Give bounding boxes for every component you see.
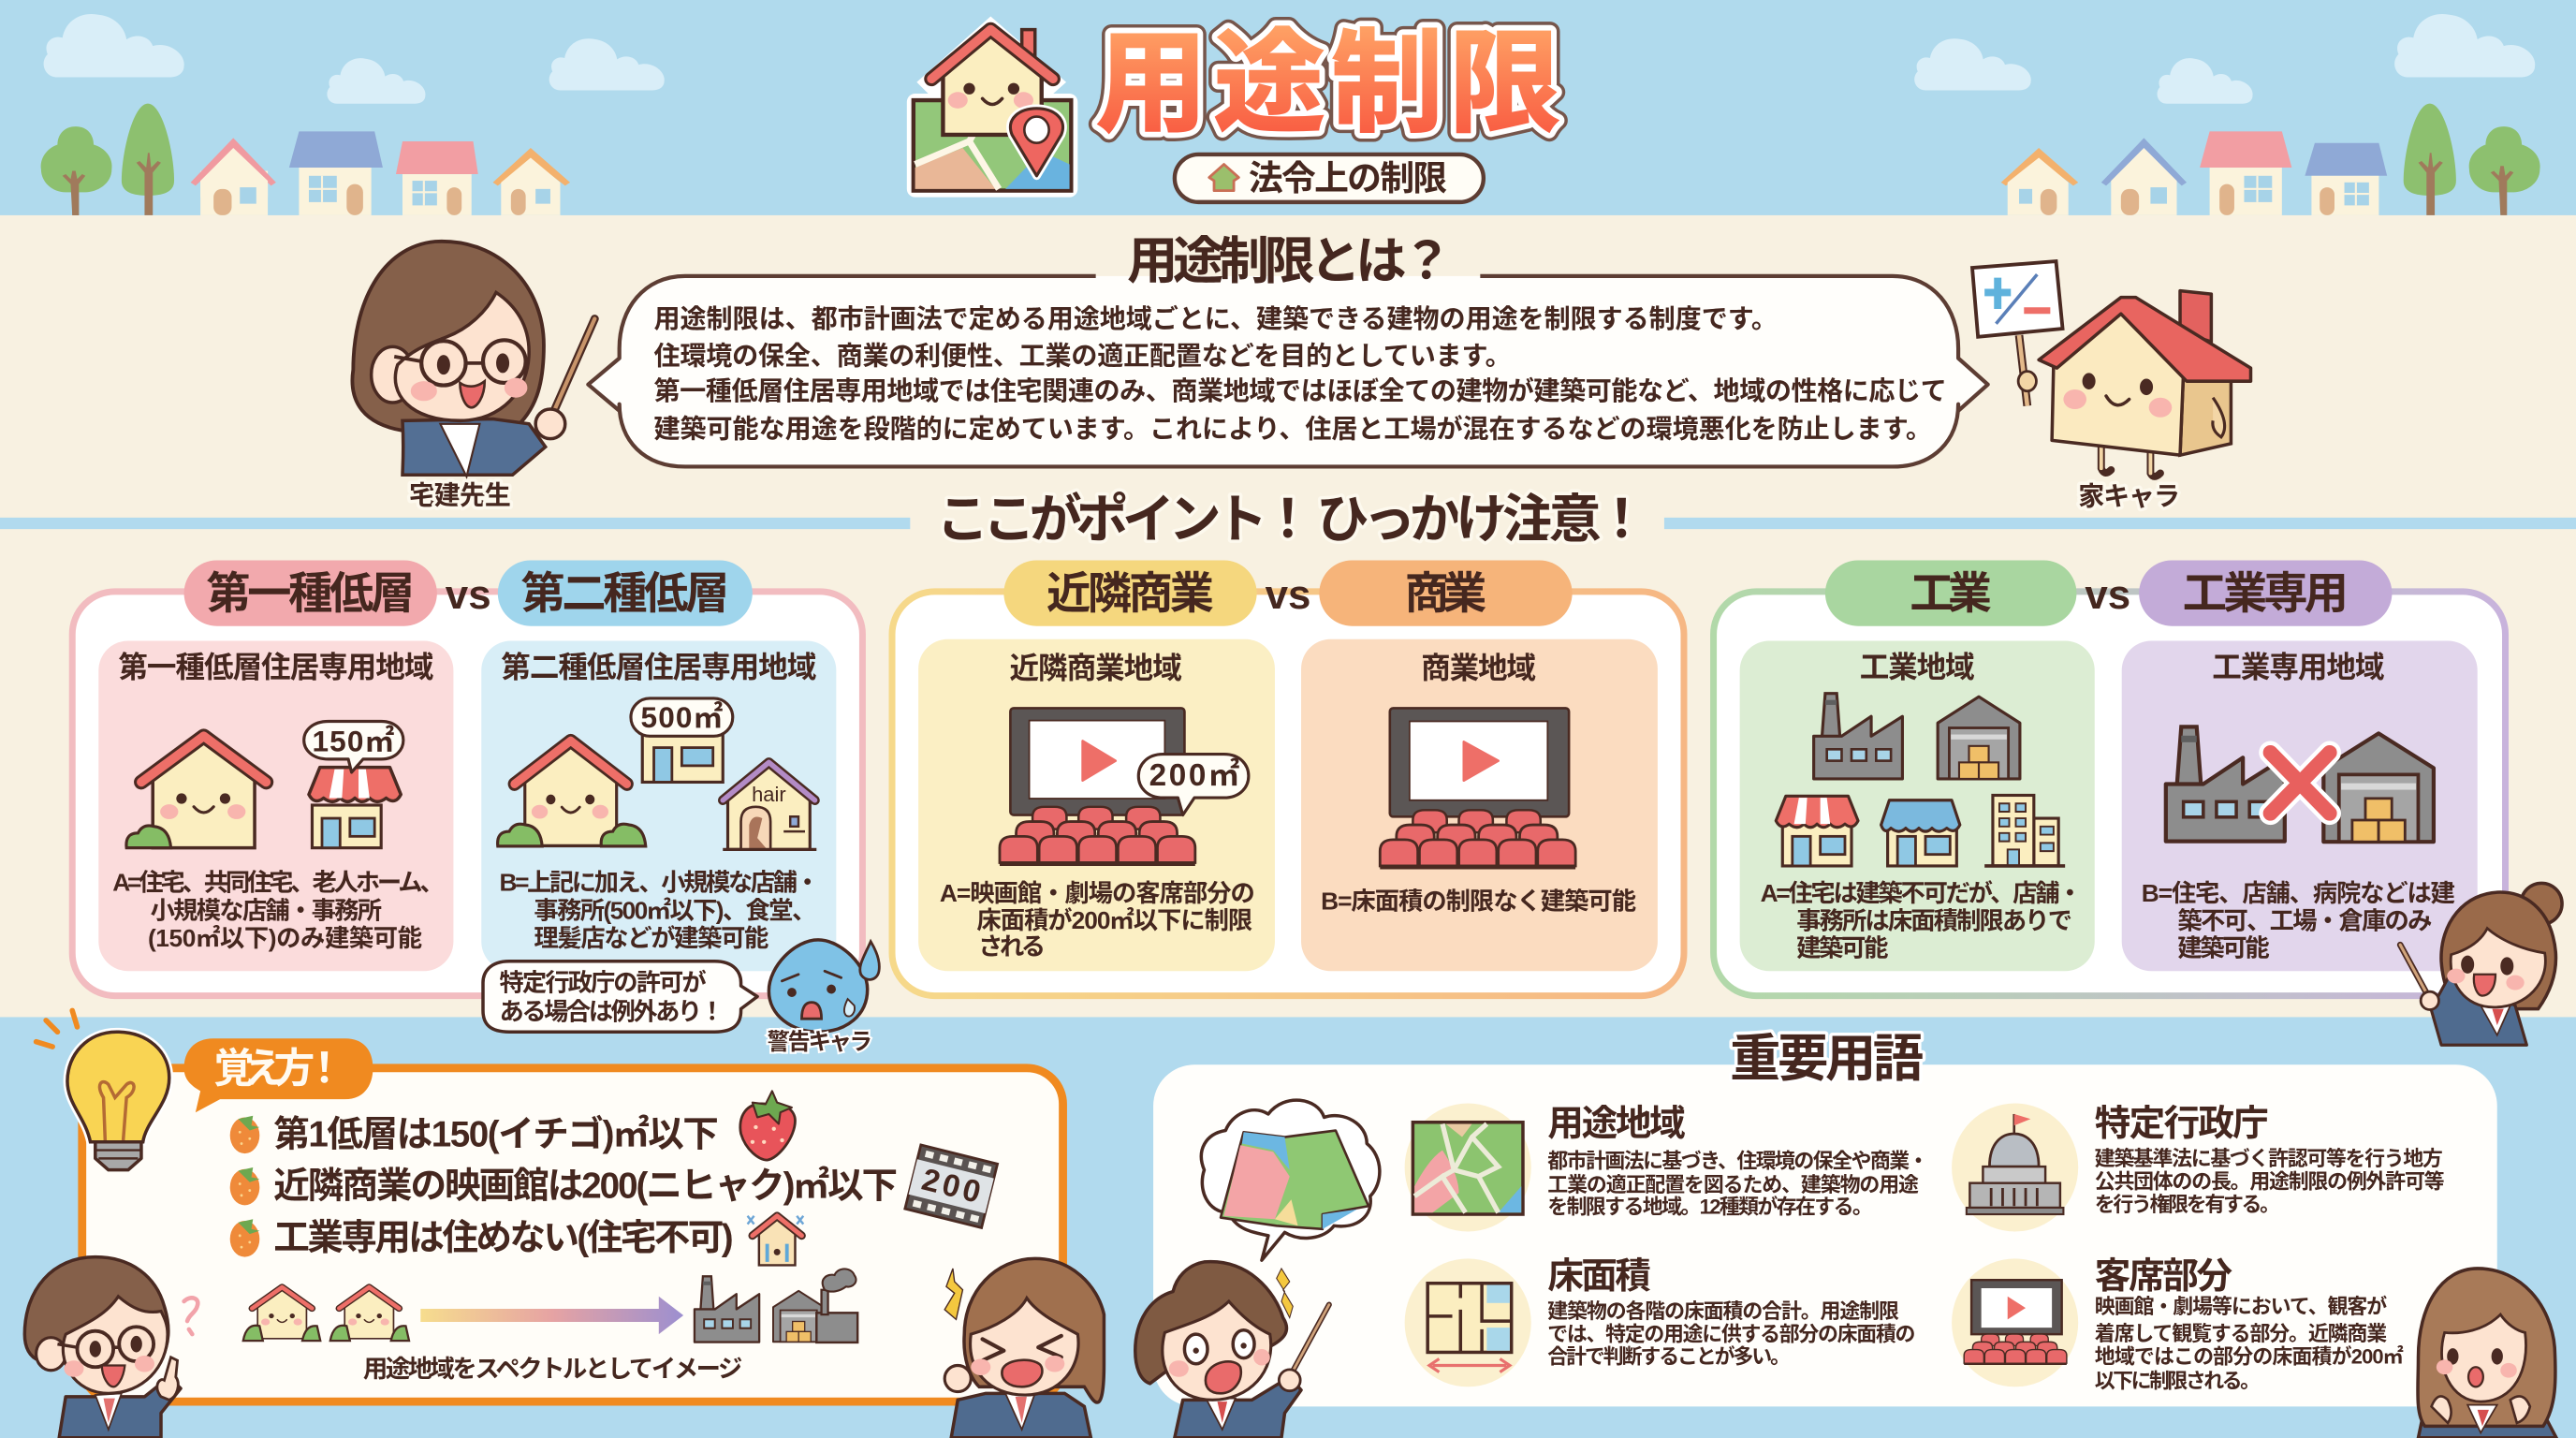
speech bubble: explanation: 住環境の保全、商業の利便性、工業の適正配置などを目的としています。 <box>654 341 1512 370</box>
card: neighbourhood commercial: される <box>978 932 1046 961</box>
background: cream band <box>0 215 2576 1019</box>
card: exclusive industrial: B=住宅、店舗、病院などは建 <box>2142 879 2455 907</box>
tip 1: 第1低層は150(イチゴ)㎡以下 <box>273 1114 719 1154</box>
label: vs: vs <box>1266 572 1310 618</box>
card: industrial <box>1740 640 2095 971</box>
card: industrial: 工業地域 <box>1860 651 1975 684</box>
term: floor area: では、特定の用途に供する部分の床面積の <box>1547 1323 1915 1346</box>
pill: commercial: 商業 <box>1405 569 1486 619</box>
term: zoning district: を制限する地域。12種類が存在する。 <box>1547 1196 1873 1219</box>
icon: factory and warehouse <box>1814 694 2020 779</box>
icon: film strip 200: 200 <box>918 1163 984 1211</box>
speech bubble: explanation: 建築可能な用途を段階的に定めています。これにより、住居と工場が混在するなどの環境悪化を防止します。 <box>654 414 1932 444</box>
icon: map and house logo <box>907 17 1077 198</box>
pill: class 1 low-rise <box>184 560 437 626</box>
callout: warning bubble <box>483 961 757 1032</box>
card: commercial: 商業地域 <box>1421 651 1536 684</box>
pill: class 1 low-rise: 第一種低層 <box>206 569 415 619</box>
tip 2: 近隣商業の映画館は200(ニヒャク)㎡以下 <box>273 1167 898 1207</box>
card: commercial <box>1301 639 1658 971</box>
icon: shop with 500 bubble <box>631 698 733 782</box>
label: warning character: 警告キャラ <box>768 1029 872 1055</box>
icon: hair salon: hair <box>752 783 786 806</box>
card: industrial: A=住宅は建築不可だが、店舗・ <box>1761 879 2083 907</box>
card: neighbourhood commercial <box>918 639 1275 971</box>
card: neighbourhood commercial: 近隣商業地域 <box>1010 651 1182 684</box>
subtitle pill <box>1175 154 1484 202</box>
term: audience seating: 着席して観覧する部分。近隣商業 <box>2095 1322 2387 1345</box>
character: warning droplet <box>768 940 879 1032</box>
term: audience seating: 以下に制限される。 <box>2095 1370 2261 1393</box>
card: class 2 low-rise: 事務所(500㎡以下)、食堂、 <box>534 896 816 924</box>
character: surprised boy with pointer <box>1135 1262 1329 1438</box>
card: exclusive industrial: 築不可、工場・倉庫のみ <box>2177 907 2432 935</box>
badge: how to remember: 覚え方！ <box>213 1046 345 1092</box>
icon: hair salon <box>723 762 816 849</box>
card: class 1 low-rise <box>98 640 453 971</box>
label: house character: 家キャラ <box>2078 482 2180 511</box>
term: designated administrative agency: 公共団体のの長。用途制限の例外許可等 <box>2095 1169 2445 1193</box>
pill: class 2 low-rise <box>498 560 753 626</box>
icon: smiling house <box>498 741 646 846</box>
pill: commercial <box>1319 560 1573 626</box>
term: designated administrative agency <box>1952 1104 2445 1231</box>
pill: neighbourhood commercial <box>1003 560 1257 626</box>
icon: thought bubble with map <box>1201 1100 1380 1260</box>
card: class 2 low-rise: 理髪店などが建築可能 <box>534 924 768 952</box>
card: neighbourhood commercial: A=映画館・劇場の客席部分の <box>940 879 1255 907</box>
term: audience seating <box>1952 1256 2404 1393</box>
card: class 1 low-rise: 第一種低層住居専用地域 <box>118 651 433 684</box>
subtitle pill: 法令上の制限 <box>1249 159 1447 198</box>
card: neighbourhood commercial: 床面積が200㎡以下に制限 <box>976 906 1252 934</box>
term: zoning district <box>1405 1104 1928 1231</box>
term: zoning district: 都市計画法に基づき、住環境の保全や商業・ <box>1547 1149 1928 1172</box>
panel: commercial comparison <box>892 560 1684 996</box>
character: teacher with pointer <box>352 242 594 477</box>
speech bubble: explanation: 第一種低層住居専用地域では住宅関連のみ、商業地域ではほぼ全ての建物が建築可能など、地域の性格に応じて <box>654 375 1947 405</box>
character: worried long-haired girl <box>2418 1269 2556 1438</box>
clouds right <box>1914 14 2535 104</box>
term: audience seating: 地域ではこの部分の床面積が200㎡ <box>2095 1344 2404 1368</box>
term: floor area: 建築物の各階の床面積の合計。用途制限 <box>1547 1299 1899 1323</box>
title: 用途制限 <box>1096 22 1560 146</box>
icon: strawberry <box>740 1091 795 1160</box>
pill: exclusive industrial <box>2139 560 2392 626</box>
icon: cinema with seats <box>1380 708 1575 868</box>
pill: industrial: 工業 <box>1910 569 1992 619</box>
heading: points to watch: ここがポイント！ ひっかけ注意！ <box>936 490 1647 549</box>
icon: crying house <box>748 1216 803 1265</box>
character: frustrated girl <box>944 1258 1104 1438</box>
callout: warning bubble: ある場合は例外あり！ <box>500 997 724 1025</box>
icon: cinema with seats: 200㎡ <box>1149 758 1239 793</box>
term: audience seating: 映画館・劇場等において、観客が <box>2095 1295 2387 1318</box>
term: designated administrative agency: 特定行政庁 <box>2095 1104 2269 1144</box>
card: industrial: 建築可能 <box>1796 934 1888 962</box>
card: exclusive industrial: 建築可能 <box>2177 934 2270 962</box>
background: sky <box>0 0 2576 217</box>
term: zoning district: 工業の適正配置を図るため、建築物の用途 <box>1547 1173 1919 1196</box>
card: class 2 low-rise: B=上記に加え、小規模な店舗・ <box>500 868 820 896</box>
term: zoning district: 用途地域 <box>1547 1104 1686 1144</box>
pill: neighbourhood commercial: 近隣商業 <box>1046 569 1214 619</box>
character: house with sign <box>1972 261 2250 477</box>
card: industrial: 事務所は床面積制限ありで <box>1796 907 2072 935</box>
term: floor area: 床面積 <box>1547 1256 1651 1297</box>
icon: film strip 200 <box>905 1145 998 1227</box>
icon: factories <box>695 1269 857 1343</box>
icon: factory and warehouse crossed out <box>2166 726 2434 842</box>
icon: smiling house <box>126 736 266 848</box>
panel: memory tips <box>37 1010 1063 1401</box>
band lines beside point heading <box>0 518 2576 529</box>
speech bubble: explanation <box>588 276 1988 466</box>
title: 用途制限 <box>1096 22 1560 146</box>
icon: shops and office building <box>1776 795 2065 866</box>
badge: how to remember <box>184 1038 373 1112</box>
pill: class 2 low-rise: 第二種低層 <box>520 569 729 619</box>
label: spectrum caption: 用途地域をスペクトルとしてイメージ <box>363 1355 742 1383</box>
title: 用途制限 <box>1096 22 1560 146</box>
label: vs: vs <box>446 572 491 618</box>
panel: industrial comparison <box>1714 560 2506 996</box>
term: designated administrative agency: を行う権限を有する。 <box>2095 1193 2280 1216</box>
heading: key terms: 重要用語 <box>1730 1031 1924 1088</box>
heading: what is youto seigen: 用途制限とは？ <box>1127 233 1453 290</box>
card: commercial: B=床面積の制限なく建築可能 <box>1321 888 1636 916</box>
panel: key terms <box>1153 1064 2497 1406</box>
tip 3: 工業専用は住めない(住宅不可) <box>273 1218 734 1258</box>
card: class 2 low-rise: 第二種低層住居専用地域 <box>501 651 816 684</box>
card: class 1 low-rise: A=住宅、共同住宅、老人ホーム、 <box>112 868 445 896</box>
card: exclusive industrial <box>2122 640 2478 971</box>
diagram: spectrum of zones <box>243 1269 857 1383</box>
card: exclusive industrial: 工業専用地域 <box>2212 651 2385 684</box>
card: class 1 low-rise: 小規模な店舗・事務所 <box>151 896 382 924</box>
icon: cinema with seats <box>1000 708 1249 864</box>
card: class 2 low-rise <box>481 640 836 971</box>
character: girl with bun and pointer <box>2400 883 2562 1045</box>
pill: exclusive industrial: 工業専用 <box>2183 569 2349 619</box>
arrow: zones spectrum <box>420 1297 683 1334</box>
callout: warning bubble: 特定行政庁の許可が <box>500 969 707 997</box>
clouds left <box>44 14 665 104</box>
card: class 1 low-rise: (150㎡以下)のみ建築可能 <box>148 924 422 952</box>
panel: low-rise residential comparison <box>72 560 862 996</box>
term: designated administrative agency: 建築基準法に基づく許認可等を行う地方 <box>2095 1147 2443 1170</box>
term: floor area: 合計で判断することが多い。 <box>1547 1344 1791 1368</box>
label: vs: vs <box>2085 572 2130 618</box>
icon: shop with 500 bubble: 500㎡ <box>640 700 724 734</box>
icon: light bulb <box>37 1010 169 1170</box>
speech bubble: explanation: 用途制限は、都市計画法で定める用途地域ごとに、建築できる建物の用途を制限する制度です。 <box>654 303 1778 333</box>
background: lower blue band <box>0 1017 2576 1438</box>
label: teacher: 宅建先生 <box>409 481 511 510</box>
town right: houses and trees <box>2001 104 2540 215</box>
term: floor area <box>1405 1256 1915 1387</box>
character: boy with glasses <box>24 1257 198 1438</box>
icon: houses <box>243 1287 409 1341</box>
icon: shop with 150 bubble: 150㎡ <box>312 725 395 758</box>
pill: industrial <box>1825 560 2076 626</box>
town left: trees and houses <box>41 104 570 215</box>
icon: shop with 150 bubble <box>304 721 403 848</box>
term: audience seating: 客席部分 <box>2095 1256 2233 1297</box>
